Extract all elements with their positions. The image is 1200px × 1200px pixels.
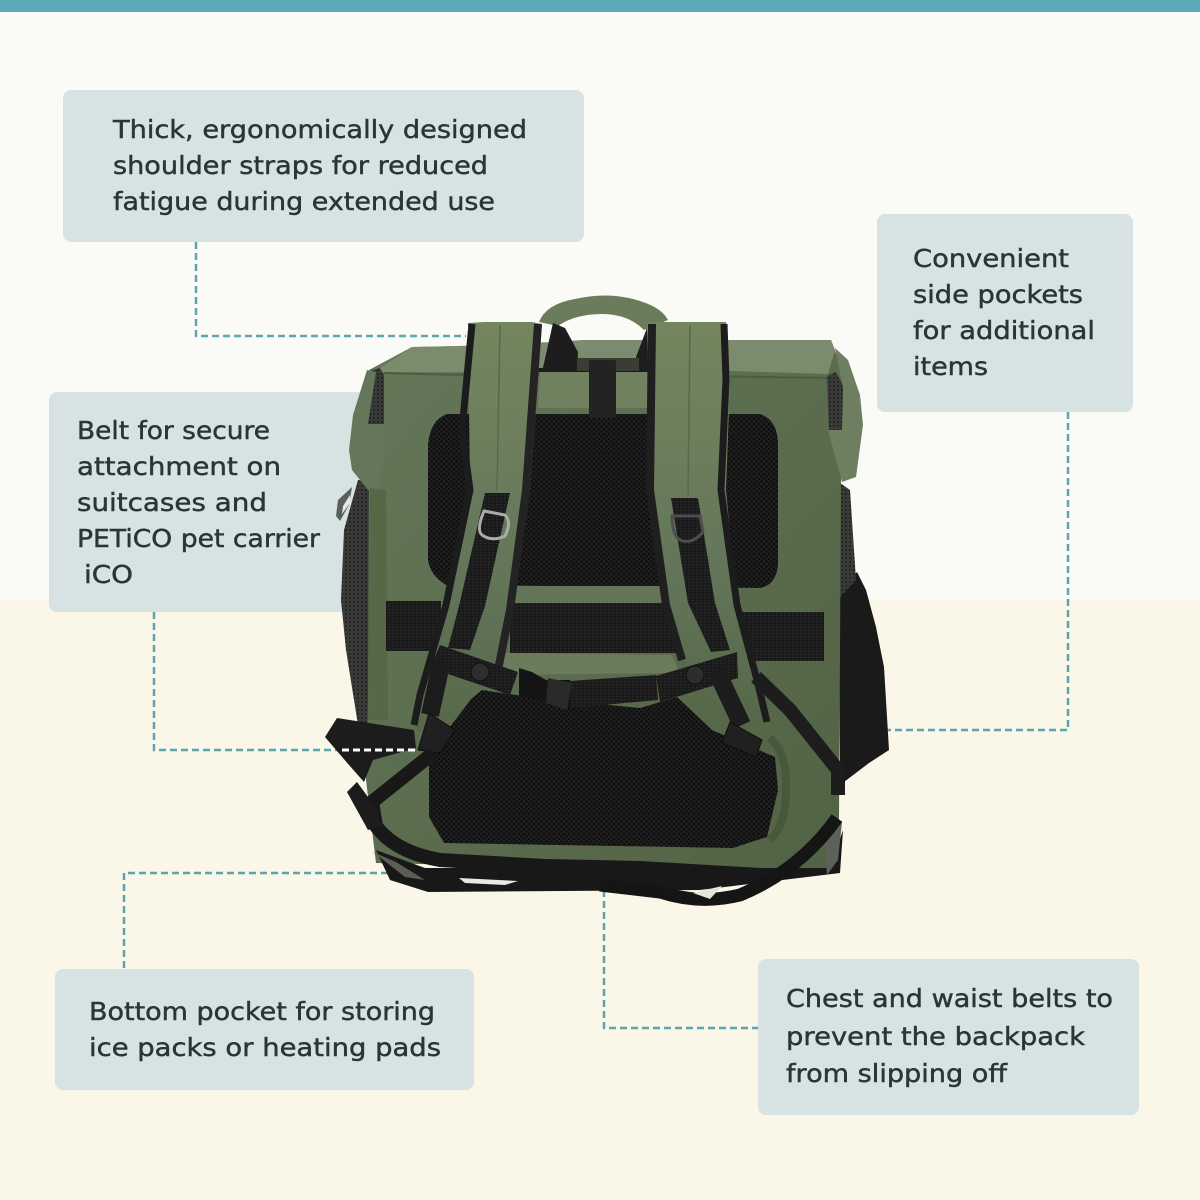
side pocket right [839,572,889,785]
panel: side pockets callout: Convenient [913,244,1069,273]
leader lines [124,242,1068,1028]
panel: shoulder straps callout: fatigue during extended use [113,187,495,216]
top teal bar [0,0,1200,12]
panel: chest and waist belts callout [758,959,1139,1115]
panel: chest and waist belts callout: from slipping off [786,1059,1008,1088]
handle base right [636,328,650,372]
strap drops to adjusters [430,660,442,715]
lower mesh pad [429,690,778,848]
left strap stitching [497,325,500,490]
zipper pull [336,487,352,521]
left D-ring [479,511,508,539]
panel under upper mesh [510,586,672,603]
panel: shoulder straps callout: shoulder straps for reduced [113,151,488,180]
panel: side pockets callout [877,214,1133,412]
right side flap [828,348,863,482]
bottom edge [376,830,843,892]
handle base left [542,323,578,372]
body [366,340,843,873]
mesh between straps top [538,368,648,372]
side mesh left [341,480,376,725]
belt callout text: iCO [84,560,133,589]
top seam [384,373,830,378]
chest strap [430,645,742,725]
panel: bottom pocket callout: Bottom pocket for storing [89,997,435,1026]
panel: shoulder straps callout [63,90,584,242]
snap left [471,663,489,681]
background: lower cream band [0,600,1200,1200]
left side flap [349,370,384,490]
panel: side pockets callout: items [913,352,988,381]
belt callout text: attachment on [77,452,281,481]
belt callout text: suitcases and [77,488,267,517]
handle [539,295,668,330]
right strap stitching [688,325,690,495]
bottom strap right [600,818,837,899]
panel: chest and waist belts callout: Chest and waist belts to [786,984,1113,1013]
illustration: backpack rear view [325,295,889,899]
right lower mesh edge [770,738,786,840]
snap right [686,666,704,684]
right strap webbing [671,498,730,652]
panel: shoulder straps callout: Thick, ergonomically designed [112,115,527,144]
chest buckle [519,668,570,708]
right shoulder strap [647,322,767,725]
left strap webbing [448,493,510,650]
left shoulder strap [414,322,542,740]
adjuster right [722,722,762,757]
side mesh right [836,480,856,600]
top loop tab [589,360,616,418]
bottom corners grey [824,822,842,875]
bottom corner left [373,852,425,880]
belt callout text: Belt for secure [77,416,270,445]
belt callout text: PETiCO pet carrier [77,524,321,553]
mesh strip behind tab [577,358,639,371]
left strap to bottom [372,754,760,875]
side mesh top left [366,368,384,424]
adjuster left [418,713,455,753]
panel: side pockets callout: for additional [913,316,1095,345]
right diagonal strap [756,677,838,795]
panel: side pockets callout: side pockets [913,280,1083,309]
panel: belt callout box [49,392,379,612]
back belt [386,601,824,661]
bottom pocket highlights [459,878,518,885]
loose strap end left [347,782,382,830]
upper mesh pad [428,414,778,588]
lower panel light [490,653,680,675]
right D-ring [672,516,703,541]
panel: chest and waist belts callout: prevent the backpack [786,1022,1086,1051]
side strip left [368,488,388,720]
top panel [380,340,835,374]
green band [538,372,650,408]
panel: bottom pocket callout: ice packs or heating pads [89,1033,441,1062]
belt callout text [77,416,321,589]
left loose flap [325,718,416,782]
white leader segment over backpack [342,748,418,752]
panel: bottom pocket callout [55,969,474,1090]
side mesh top right [827,372,843,430]
